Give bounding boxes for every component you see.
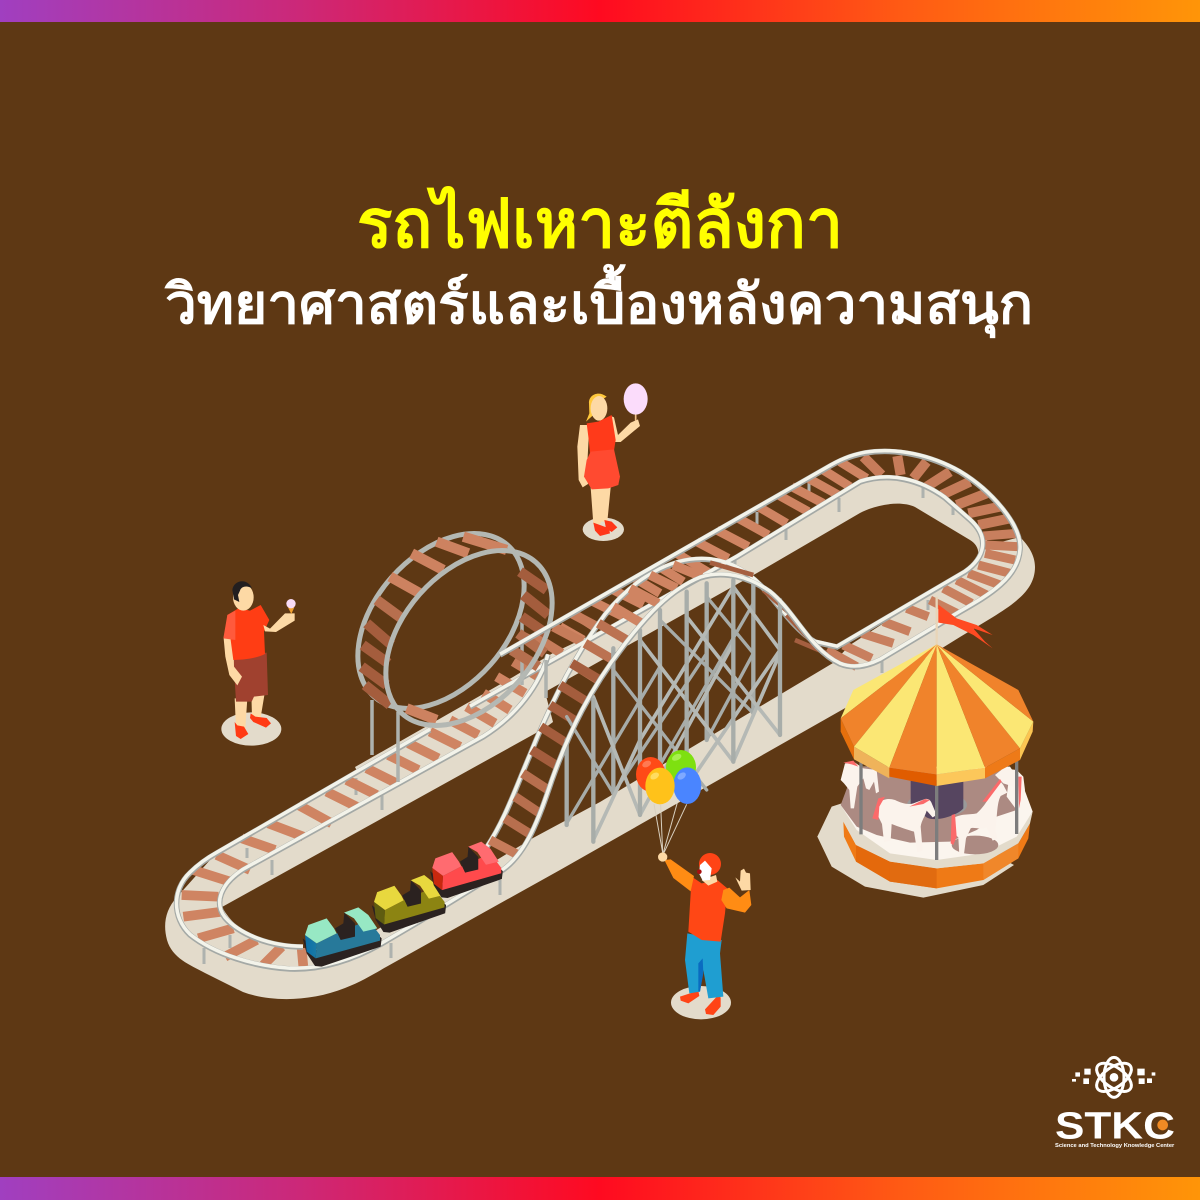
carousel inner room — [841, 767, 1017, 843]
heading: white subtitle line: วิทยาศาสตร์และเบื้องหลังความสนุก — [164, 264, 1033, 339]
clown hand — [658, 852, 667, 862]
person: man with ice cream — [221, 581, 296, 746]
logo wordmark: STKC — [1055, 1106, 1175, 1148]
loop supports — [372, 620, 546, 782]
balloon strings — [654, 803, 687, 853]
carousel roof — [841, 644, 1033, 774]
heading: yellow title line: รถไฟเหาะตีลังกา — [357, 185, 843, 262]
clown shoes — [680, 991, 721, 1015]
woman top — [587, 415, 616, 453]
loop ties — [362, 537, 548, 720]
carousel drum — [843, 822, 1030, 888]
carousel floor rim — [841, 805, 1033, 868]
woman arm — [577, 425, 589, 487]
rails: far hill and straight — [470, 477, 983, 847]
horse: back right — [995, 768, 1025, 808]
hill ties — [490, 663, 598, 855]
man raised arm — [263, 613, 295, 632]
man arm — [224, 638, 242, 685]
person: clown with balloons — [636, 750, 751, 1019]
title — [164, 185, 1033, 339]
balloon green — [666, 750, 696, 785]
coaster platform — [165, 477, 1035, 999]
man head — [233, 584, 254, 611]
person: woman with cotton candy — [577, 383, 648, 541]
horse: back left — [841, 761, 879, 808]
man shoes — [235, 713, 271, 739]
clown raised arm — [664, 859, 694, 891]
carousel valance — [841, 718, 1033, 786]
clown disc — [671, 986, 731, 1019]
man sleeve — [223, 611, 235, 640]
coaster cars — [303, 842, 503, 967]
logo orange dot — [1157, 1120, 1168, 1130]
clown face — [699, 861, 712, 881]
horse: front centre — [872, 797, 937, 852]
carousel column — [907, 780, 967, 819]
woman skirt — [584, 449, 620, 489]
woman shoes — [593, 520, 617, 536]
coaster posts — [204, 483, 953, 964]
track ties: left curve and near straight — [182, 613, 597, 967]
woman legs — [591, 487, 611, 524]
loop near ring — [353, 519, 585, 757]
clown shirt — [688, 877, 727, 942]
clown waving hand — [735, 869, 751, 891]
top gradient bar — [0, 0, 1200, 22]
loop far ring — [325, 502, 557, 740]
carousel poles — [861, 760, 1017, 860]
roller coaster — [165, 451, 1035, 999]
clown nose — [697, 869, 702, 874]
carousel floor — [841, 767, 1033, 860]
upper hill ties — [572, 563, 827, 680]
trestle near plane — [593, 580, 780, 842]
balloon blue — [673, 767, 701, 804]
logo atom icon — [1072, 1057, 1155, 1097]
carousel ground shadow — [817, 803, 1014, 898]
vertical loop — [325, 502, 585, 757]
car: yellow — [372, 875, 446, 933]
man hair — [232, 581, 252, 602]
logo tagline: Science and Technology Knowledge Center — [1055, 1143, 1174, 1149]
car: blue — [303, 907, 382, 967]
cotton candy — [624, 383, 648, 421]
track ties: far straight and top curve — [560, 456, 1018, 667]
man disc — [221, 712, 281, 746]
car: red — [430, 842, 503, 898]
ice cream — [286, 599, 296, 614]
carousel flag — [938, 605, 993, 648]
carousel — [817, 597, 1033, 898]
woman disc — [583, 518, 624, 541]
man shirt — [227, 605, 269, 660]
clown hair — [699, 853, 721, 875]
horse: front right — [951, 779, 1007, 855]
logo: STKC — [1055, 1057, 1175, 1149]
woman head — [591, 396, 607, 421]
clown neck — [702, 875, 717, 886]
balloon yellow — [645, 768, 675, 804]
man shorts — [233, 653, 268, 702]
rails: near hill — [417, 451, 1020, 923]
trestle far plane — [567, 583, 753, 825]
carousel floor shadow — [952, 836, 998, 854]
clown trouser shade — [698, 958, 703, 992]
rails: left curve — [176, 654, 548, 969]
carousel flag pole — [933, 597, 940, 645]
man legs — [235, 693, 265, 728]
bottom gradient bar — [0, 1177, 1200, 1200]
woman hair — [586, 394, 607, 422]
balloon red — [636, 757, 665, 792]
woman raised arm — [611, 416, 640, 442]
clown trousers — [685, 933, 723, 998]
clown other arm — [721, 888, 751, 913]
trestle support — [567, 580, 780, 842]
